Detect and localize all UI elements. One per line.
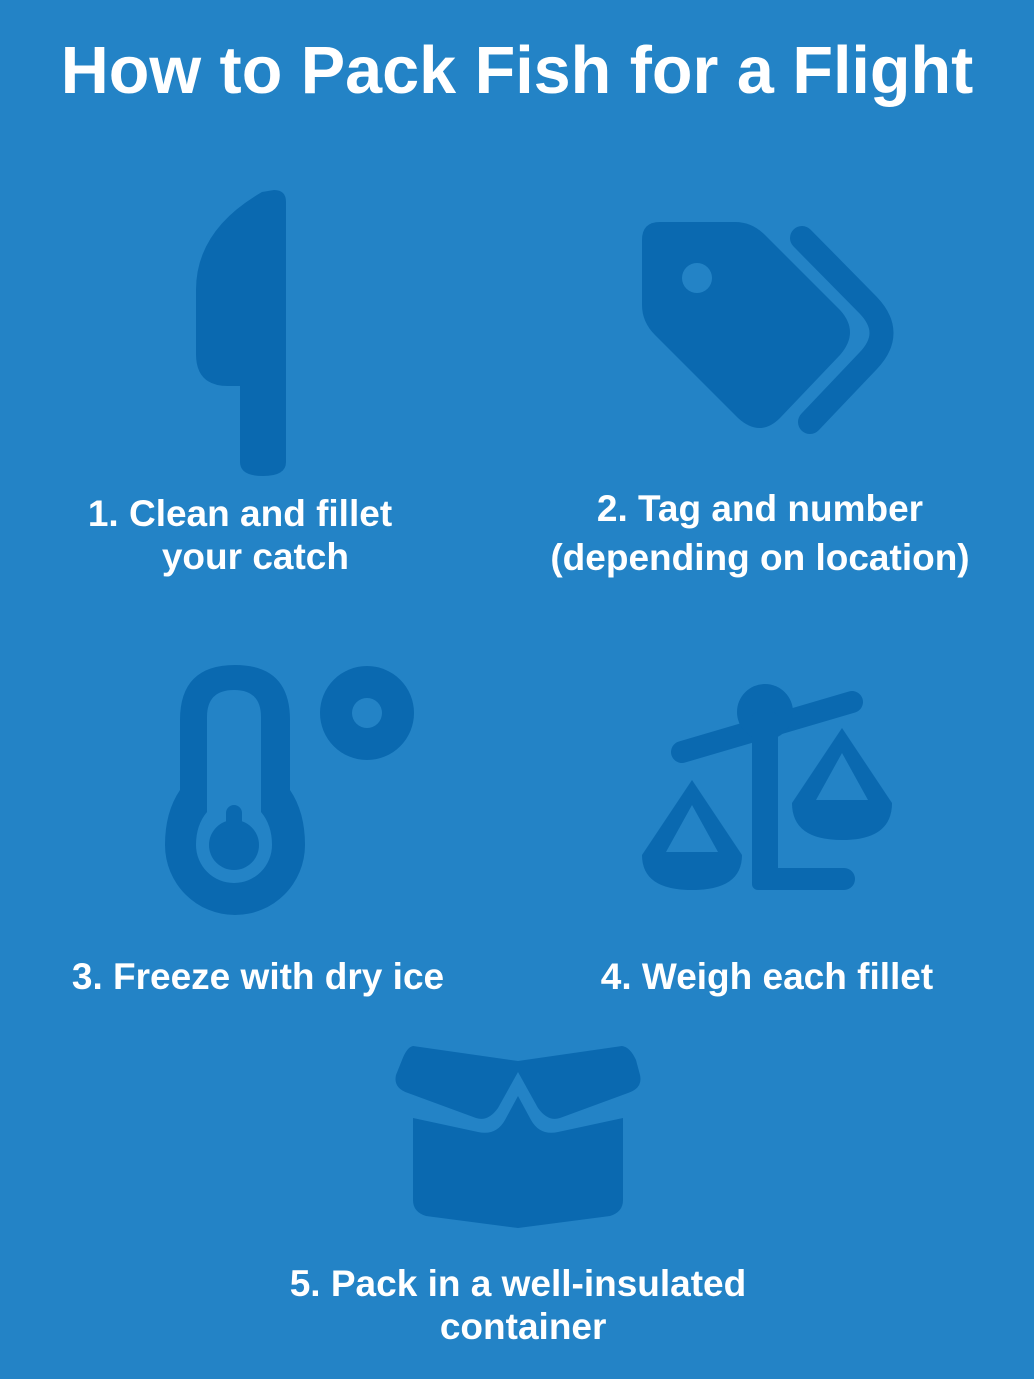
text: step 5: 5. Pack in a well-insulated [290,1263,746,1304]
text: step 1 [88,493,392,577]
icon: scale [642,684,892,890]
text: step 1: your catch [162,536,349,577]
text: step 5 [290,1263,746,1347]
text: step 2: 2. Tag and number [597,488,923,529]
icon: box [396,1046,640,1228]
text: step 2: (depending on location) [550,537,970,578]
icon: thermometer [165,665,414,915]
icon: tag [642,222,882,428]
text: step 4: 4. Weigh each fillet [601,956,933,997]
text: step 1: 1. Clean and fillet [88,493,392,534]
text: step 2 [550,488,970,578]
title: How to Pack Fish for a Flight [61,34,973,108]
text: step 3: 3. Freeze with dry ice [72,956,444,997]
text: step 5: container [440,1306,606,1347]
icon: knife [196,190,286,476]
